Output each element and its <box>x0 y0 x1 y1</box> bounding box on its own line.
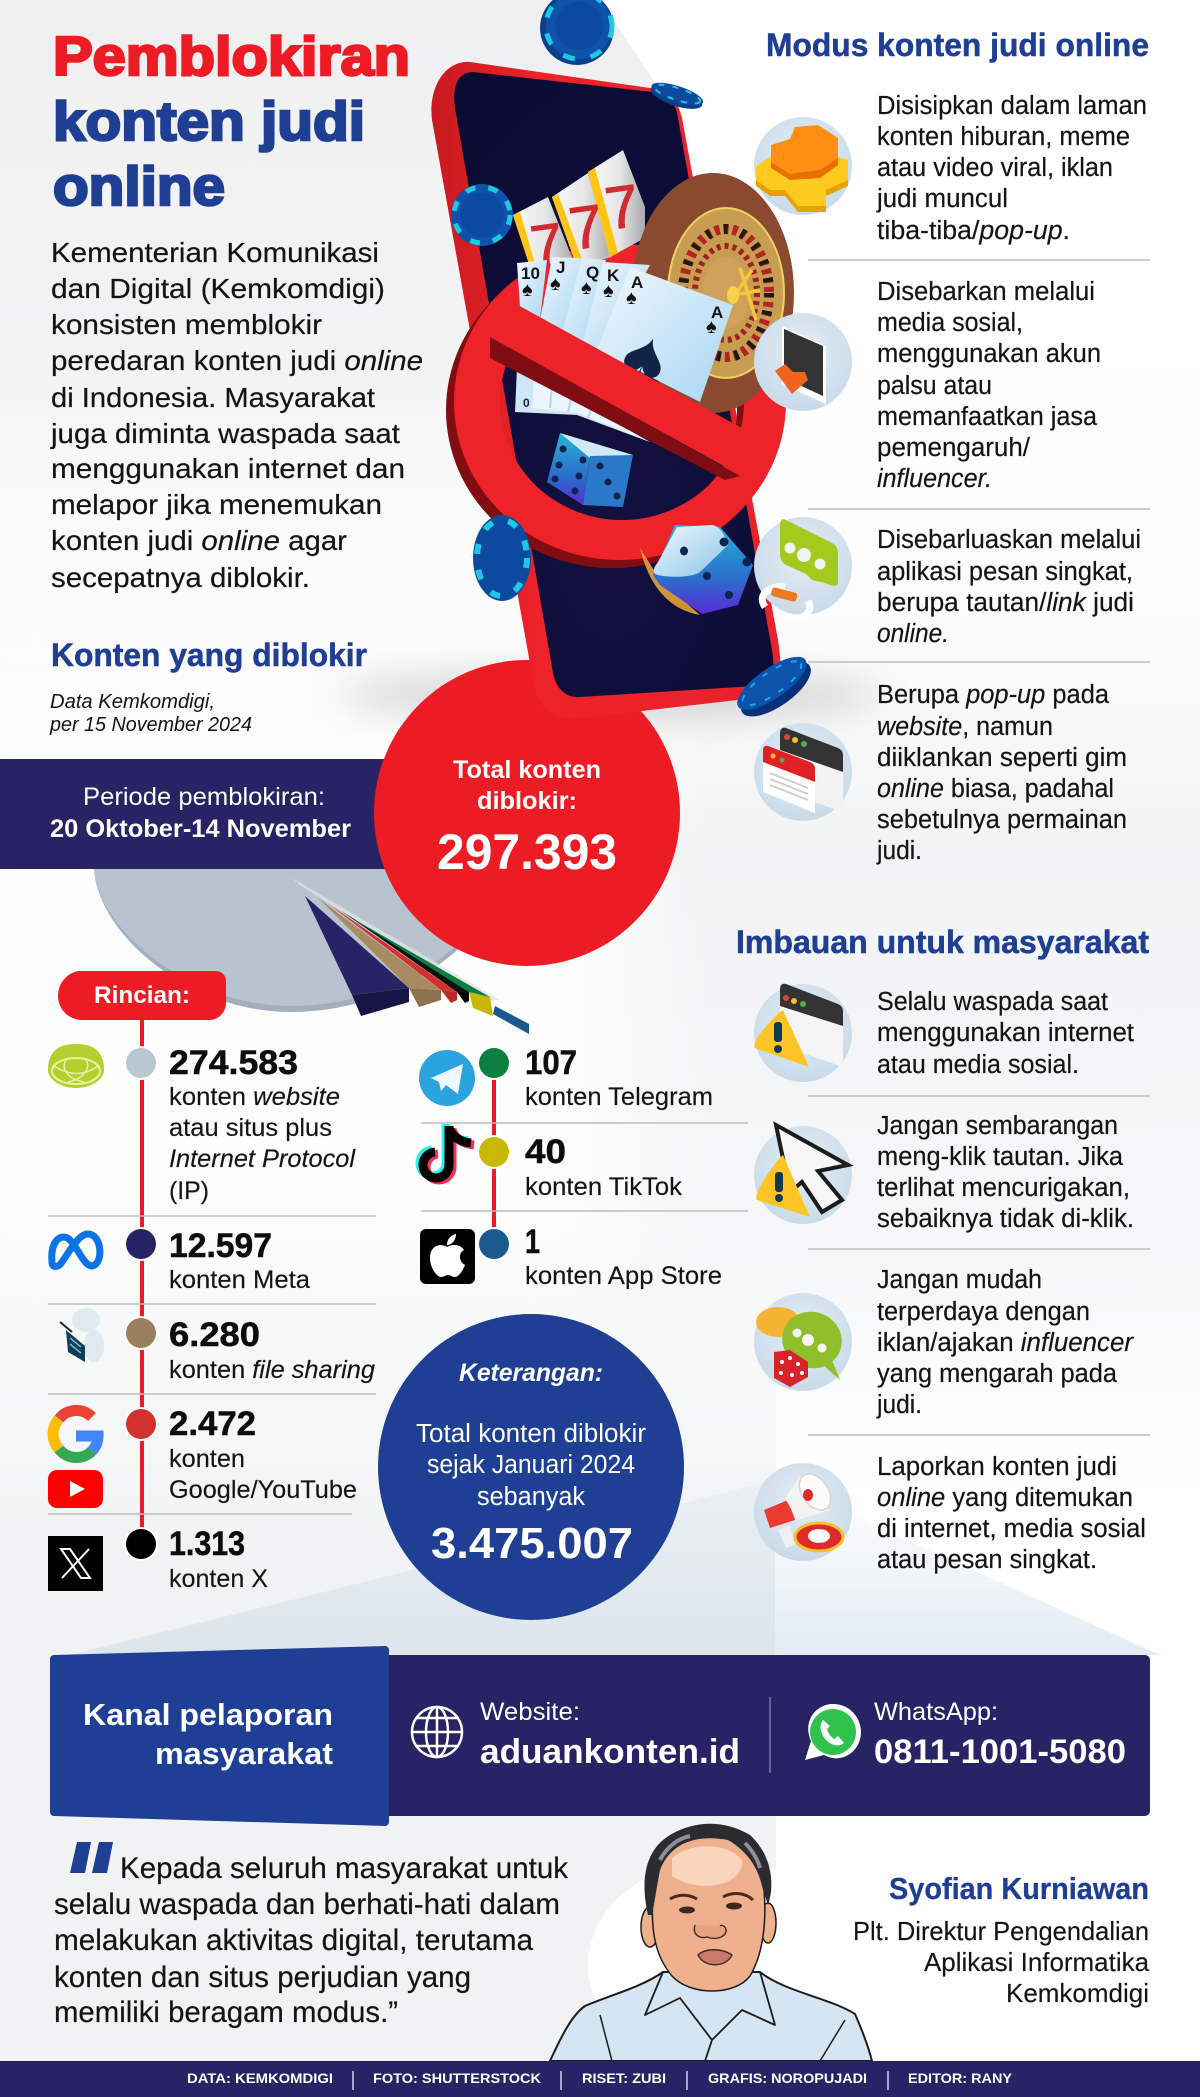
phone floor shadow <box>340 673 880 717</box>
footer credits: FOTO: SHUTTERSTOCK <box>373 2070 541 2086</box>
appeal 1 <box>754 984 1134 1082</box>
appeal 1 text: Selalu waspada saat <box>877 988 1108 1016</box>
prohibition bar <box>488 298 760 480</box>
item: X: 1.313 <box>169 1525 245 1563</box>
method 3 <box>754 517 1141 648</box>
item: Telegram <box>419 1044 713 1111</box>
slot machine reels: 7 <box>565 192 608 263</box>
item: Telegram: 107 <box>525 1044 577 1082</box>
blue die behind ring <box>547 433 633 507</box>
item: App Store <box>420 1223 722 1290</box>
note circle: Keterangan: <box>459 1359 603 1387</box>
icon: X <box>48 1536 103 1591</box>
quote: melakukan aktivitas digital, terutama <box>54 1924 533 1957</box>
quote: konten dan situs perjudian yang <box>54 1961 471 1994</box>
appeal 3 text: judi. <box>876 1391 922 1419</box>
appeal 1 text <box>877 988 1134 1079</box>
note circle: Total konten diblokir <box>416 1420 647 1448</box>
quote: Kepada seluruh masyarakat untuk <box>120 1852 569 1885</box>
method 4 text: sebetulnya permainan <box>877 806 1127 834</box>
item: Google and YouTube: konten <box>169 1445 245 1473</box>
method 1 text <box>876 92 1147 245</box>
footer credits <box>0 2061 1200 2097</box>
reporting channel panel <box>50 1646 1150 1826</box>
intro paragraph: menggunakan internet dan <box>51 453 405 484</box>
method 2 text: pemengaruh/ <box>877 434 1031 462</box>
playing cards: ♠ <box>550 273 561 295</box>
quote mark <box>70 1842 113 1873</box>
method 3 text: Disebarluaskan melalui <box>877 526 1141 554</box>
website: aduankonten.id <box>480 1733 740 1771</box>
period band: Periode pemblokiran: <box>83 783 325 811</box>
website: Website: <box>480 1698 580 1726</box>
small cards behind the bar <box>515 367 650 442</box>
playing cards: Q <box>586 263 599 282</box>
appeal 1 text: menggunakan internet <box>877 1019 1134 1047</box>
appeal 1 text: atau media sosial. <box>877 1051 1079 1079</box>
footer credits: DATA: KEMKOMDIGI <box>187 2070 333 2086</box>
total blocked circle: diblokir: <box>477 787 577 815</box>
appeal 3 text: Jangan mudah <box>877 1266 1042 1294</box>
item: TikTok: 40 <box>525 1133 566 1171</box>
intro paragraph: Kementerian Komunikasi <box>51 237 379 268</box>
phone body <box>431 62 780 718</box>
item: X <box>48 1525 268 1593</box>
panel heading <box>83 1697 333 1771</box>
item: website <box>48 1044 356 1205</box>
method 2 text: influencer. <box>877 465 992 493</box>
icon: warning and cursor <box>754 1125 852 1224</box>
note circle <box>378 1314 684 1620</box>
icon: Meta <box>52 1234 100 1266</box>
item: file sharing: 6.280 <box>169 1316 260 1354</box>
icon: WhatsApp <box>805 1704 861 1760</box>
icon: megaphone and chip <box>754 1463 852 1561</box>
item: Telegram: konten Telegram <box>525 1083 713 1111</box>
data source note: Data Kemkomdigi, <box>50 691 215 713</box>
method 1 text: tiba-tiba/pop-up. <box>877 217 1070 245</box>
appeal 3 text <box>876 1266 1135 1419</box>
item: TikTok: konten TikTok <box>525 1173 683 1201</box>
note circle: sejak Januari 2024 <box>427 1451 635 1479</box>
item: Meta: konten Meta <box>169 1266 310 1294</box>
method 1 text: konten hiburan, meme <box>877 123 1130 151</box>
method 2 text: media sosial, <box>877 309 1023 337</box>
appeal 2 text: terlihat mencurigakan, <box>877 1174 1130 1202</box>
total blocked circle <box>374 660 680 966</box>
icon: warning and window <box>754 984 852 1082</box>
item: Meta <box>52 1227 310 1294</box>
detail label <box>58 971 226 1020</box>
icon: Google <box>53 1410 98 1458</box>
icon: globe <box>412 1707 462 1757</box>
method 4 text: online biasa, padahal <box>877 775 1114 803</box>
method 3 text: berupa tautan/link judi <box>877 589 1134 617</box>
playing cards: J <box>556 258 565 277</box>
playing cards: K <box>607 266 620 285</box>
method 4 text: Berupa pop-up pada <box>877 681 1110 709</box>
title <box>53 25 410 217</box>
icon: bubbles and dice <box>754 1293 852 1391</box>
icon: pop-up windows <box>754 723 852 821</box>
title: online <box>53 155 225 217</box>
method 4 text: website, namun <box>877 713 1053 741</box>
intro paragraph: melapor jika menemukan <box>51 489 382 520</box>
period band: 20 Oktober-14 November <box>50 815 351 843</box>
appeal 2 <box>754 1112 1134 1233</box>
icon: cloud file <box>60 1308 104 1362</box>
speaker role: Plt. Direktur Pengendalian <box>853 1916 1149 1946</box>
phone illustration with gambling items and prohibition sign <box>431 0 819 727</box>
item: file sharing <box>60 1308 375 1384</box>
item: App Store: konten App Store <box>525 1262 722 1290</box>
method 1 text: atau video viral, iklan <box>877 154 1113 182</box>
note circle: sebanyak <box>477 1483 585 1511</box>
WhatsApp <box>874 1698 1126 1771</box>
method 4 <box>754 681 1127 865</box>
playing cards: ♠ <box>603 280 614 302</box>
playing cards: 10 <box>521 264 540 283</box>
heading: blocked content: Konten yang diblokir <box>51 637 367 673</box>
method 2 <box>754 278 1101 493</box>
method 3 text: online. <box>877 620 949 648</box>
slot machine reels <box>513 150 645 280</box>
casino chips <box>451 0 819 727</box>
speaker name: Syofian Kurniawan <box>889 1871 1149 1906</box>
playing cards: ♠ <box>522 279 533 301</box>
intro paragraph: dan Digital (Kemkomdigi) <box>51 273 385 304</box>
playing cards: ♠ <box>581 277 592 299</box>
appeal 4 text: Laporkan konten judi <box>877 1453 1117 1481</box>
method 3 text: aplikasi pesan singkat, <box>877 558 1133 586</box>
appeal 3 <box>754 1266 1135 1419</box>
data source note: per 15 November 2024 <box>49 714 252 736</box>
speaker role <box>853 1916 1150 2008</box>
intro paragraph: konten judi online agar <box>51 525 347 556</box>
icon: puzzle <box>754 117 852 215</box>
playing cards: A <box>711 303 723 322</box>
playing cards: ♠ <box>706 316 717 338</box>
method 1 text: Disisipkan dalam laman <box>877 92 1147 120</box>
title: konten judi <box>53 90 365 152</box>
WhatsApp: WhatsApp: <box>874 1698 998 1726</box>
appeal 3 text: iklan/ajakan influencer <box>877 1329 1135 1357</box>
appeal 3 text: terperdaya dengan <box>877 1298 1090 1326</box>
icon: chat and link <box>754 517 852 618</box>
method 1 text: judi muncul <box>876 185 1008 213</box>
footer credits: GRAFIS: NOROPUJADI <box>708 2070 867 2086</box>
method 4 text <box>876 681 1127 865</box>
total blocked circle: Total konten <box>453 756 601 784</box>
method 4 text: judi. <box>876 837 922 865</box>
footer credits: RISET: ZUBI <box>582 2070 666 2086</box>
period band <box>0 759 400 869</box>
intro paragraph: konsisten memblokir <box>51 309 322 340</box>
method 2 text <box>877 278 1101 493</box>
method 4 text: diiklankan seperti gim <box>877 744 1127 772</box>
speaker role: Aplikasi Informatika <box>924 1947 1150 1977</box>
intro paragraph: peredaran konten judi online <box>51 345 423 376</box>
playing cards <box>517 257 733 407</box>
pie chart base <box>94 869 500 1012</box>
timeline: right <box>477 1046 511 1261</box>
method 2 text: palsu atau <box>877 372 992 400</box>
appeal 2 text: Jangan sembarangan <box>877 1112 1118 1140</box>
timeline: left <box>58 971 226 1561</box>
title: Pemblokiran <box>53 25 410 87</box>
icon: web globe <box>48 1044 104 1088</box>
item: TikTok <box>420 1124 683 1201</box>
icon: Telegram <box>419 1050 475 1106</box>
item: website: konten website <box>169 1083 340 1111</box>
method 1 <box>754 92 1147 245</box>
playing cards: ♠ <box>609 308 682 407</box>
flaming die <box>640 525 753 615</box>
appeal 4 text: atau pesan singkat. <box>877 1546 1097 1574</box>
method 2 text: menggunakan akun <box>877 340 1101 368</box>
item: Google and YouTube: Google/YouTube <box>169 1476 357 1504</box>
item: file sharing: konten file sharing <box>169 1356 375 1384</box>
appeal 3 text: yang mengarah pada <box>877 1360 1118 1388</box>
method 2 text: memanfaatkan jasa <box>877 403 1098 431</box>
appeal 4 text <box>877 1453 1146 1574</box>
appeal 4 <box>754 1453 1146 1574</box>
icon: TikTok <box>420 1124 474 1180</box>
item: website: (IP) <box>169 1177 209 1205</box>
intro paragraph <box>50 237 423 593</box>
heading: appeal: Imbauan untuk masyarakat <box>736 924 1149 960</box>
appeal 2 text <box>877 1112 1134 1233</box>
website <box>480 1698 740 1771</box>
note circle: 3.475.007 <box>431 1519 633 1568</box>
item: Google and YouTube <box>48 1405 357 1508</box>
pie chart slices <box>305 896 529 1034</box>
item: Google and YouTube: 2.472 <box>169 1405 256 1443</box>
method 2 text: Disebarkan melalui <box>877 278 1095 306</box>
data source note <box>49 691 252 736</box>
total blocked circle: 297.393 <box>437 824 617 880</box>
icon: YouTube <box>48 1470 103 1508</box>
method 3 text <box>877 526 1141 648</box>
slot machine reels: 7 <box>601 172 644 243</box>
intro paragraph: secepatnya diblokir. <box>51 562 310 593</box>
portrait <box>550 1824 872 2061</box>
detail label: Rincian: <box>94 982 190 1009</box>
white halo behind portrait <box>588 1868 776 2000</box>
item: Meta: 12.597 <box>169 1227 272 1265</box>
item: website: Internet Protocol <box>169 1145 356 1173</box>
icon: Apple <box>420 1229 475 1284</box>
speaker role: Kemkomdigi <box>1006 1978 1149 2008</box>
playing cards: ♠ <box>626 287 637 309</box>
item: App Store: 1 <box>525 1223 540 1261</box>
icon: monitor with tick <box>754 313 852 411</box>
item: X: konten X <box>169 1565 268 1593</box>
panel heading: masyarakat <box>155 1736 333 1771</box>
intro paragraph: di Indonesia. Masyarakat <box>51 382 375 413</box>
prohibition ring <box>446 244 786 568</box>
quote: memiliki beragam modus.” <box>54 1996 398 2029</box>
quote <box>54 1842 569 2029</box>
playing cards: A <box>631 273 643 292</box>
intro paragraph: juga diminta waspada saat <box>50 418 400 449</box>
appeal 4 text: di internet, media sosial <box>877 1515 1146 1543</box>
heading: methods: Modus konten judi online <box>766 27 1149 63</box>
WhatsApp: 0811-1001-5080 <box>874 1733 1126 1771</box>
quote: selalu waspada dan berhati-hati dalam <box>54 1888 560 1921</box>
appeal 2 text: meng-klik tautan. Jika <box>877 1143 1124 1171</box>
small cards behind the bar: 0 <box>523 396 530 410</box>
footer credits: EDITOR: RANY <box>908 2070 1013 2086</box>
item: website: 274.583 <box>169 1044 298 1082</box>
slot machine reels: 7 <box>527 211 568 280</box>
item: website: atau situs plus <box>169 1114 332 1142</box>
panel heading: Kanal pelaporan <box>83 1697 333 1732</box>
appeal 2 text: sebaiknya tidak di-klik. <box>877 1205 1134 1233</box>
roulette wheel <box>632 173 794 413</box>
appeal 4 text: online yang ditemukan <box>877 1484 1133 1512</box>
